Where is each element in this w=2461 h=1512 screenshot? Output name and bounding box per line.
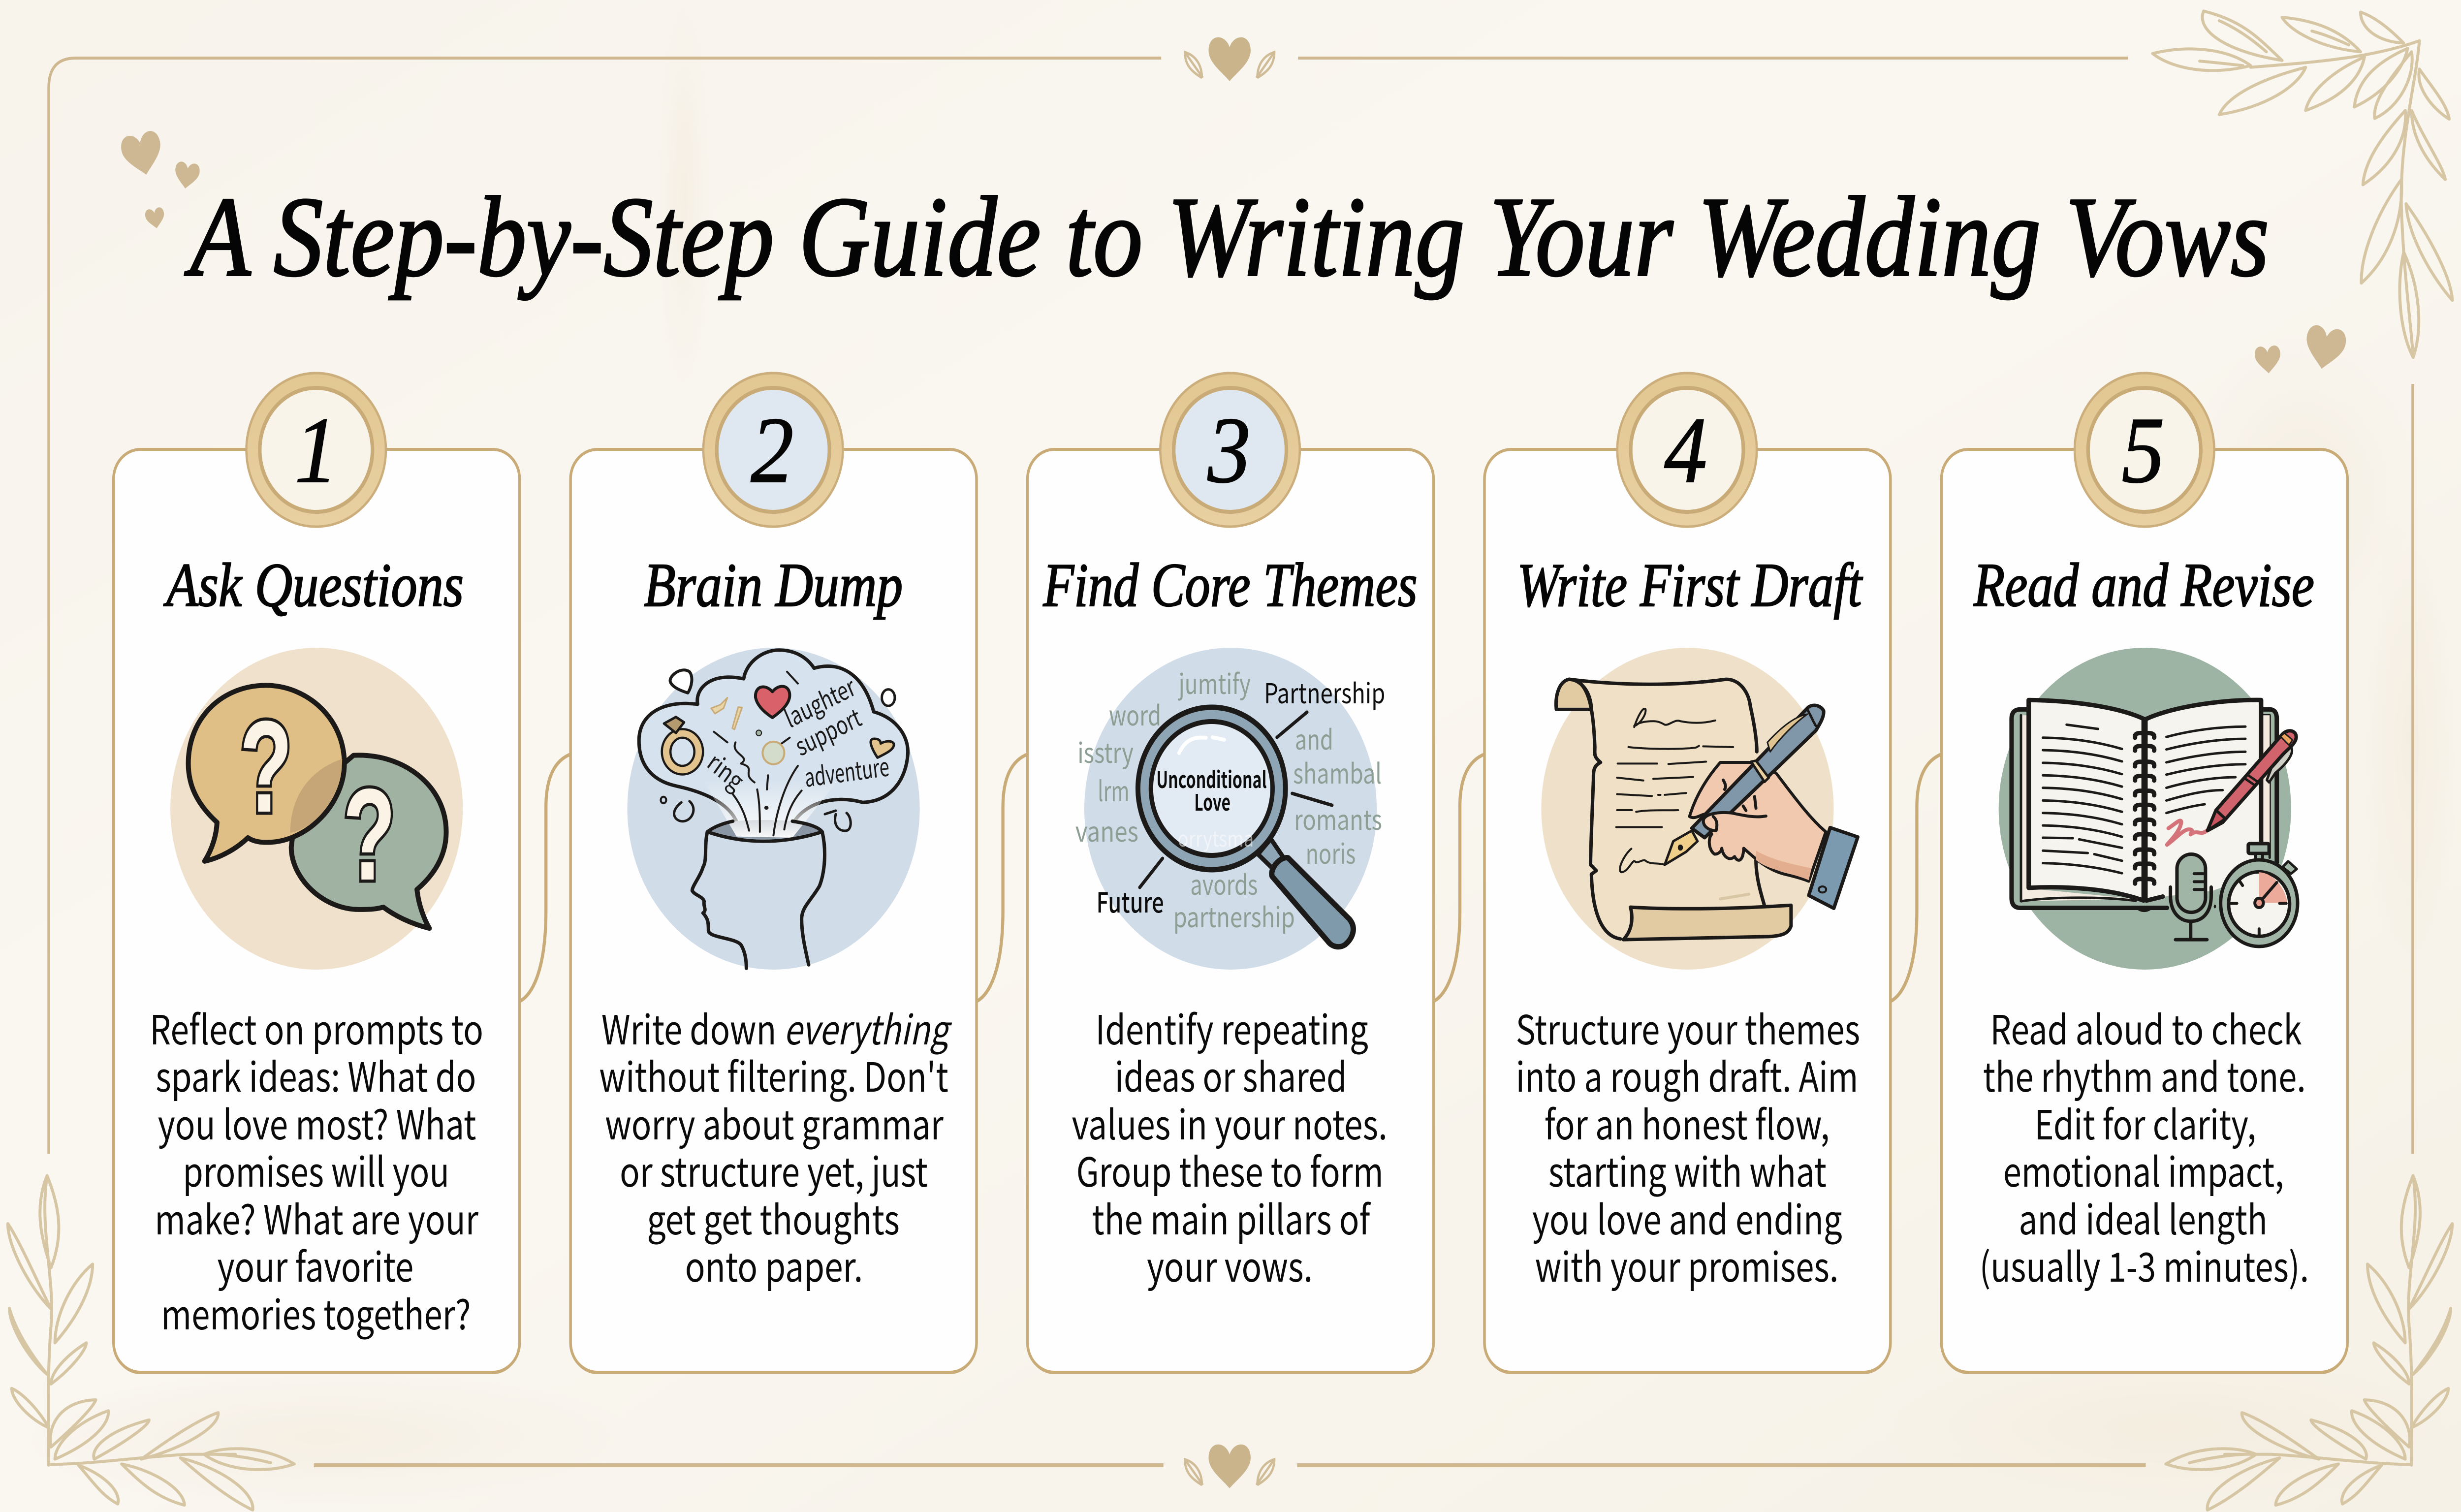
step number 3 xyxy=(1160,373,1300,527)
title: A Step-by-Step Guide to Writing Your Wedding Vows xyxy=(184,174,2269,300)
body text: values in your notes. xyxy=(1072,1093,1388,1151)
icon: magnifying glass over word cloud: and xyxy=(1295,718,1333,758)
icon: magnifying glass over word cloud: isstry xyxy=(1077,731,1134,771)
icon: magnifying glass over word cloud: word xyxy=(1109,694,1161,734)
icon: head with thought cloud: adventure xyxy=(802,747,891,795)
body text: the rhythm and tone. xyxy=(1983,1045,2306,1103)
icon: magnifying glass over word cloud: avords xyxy=(1190,863,1258,903)
body text: make? What are your xyxy=(155,1188,479,1246)
body text: and ideal length xyxy=(2019,1188,2268,1246)
heading: Find Core Themes xyxy=(1043,551,1418,620)
icon: open notebook, red pen, microphone, stopwatch xyxy=(1999,648,2298,970)
icon: magnifying glass over word cloud: jumtify xyxy=(1177,662,1251,702)
step number 5 xyxy=(2075,373,2214,527)
body text: get get thoughts xyxy=(647,1188,900,1246)
icon: magnifying glass over word cloud: romants xyxy=(1294,798,1382,838)
body text xyxy=(1516,998,1860,1293)
body text: with your promises. xyxy=(1535,1235,1838,1293)
heading: Brain Dump xyxy=(644,551,903,620)
body text xyxy=(150,998,483,1341)
body text: ideas or shared xyxy=(1115,1045,1347,1103)
panel: step 5 Read and Revise xyxy=(1941,373,2347,1374)
body text: you love most? What xyxy=(158,1093,476,1151)
icon: magnifying glass over word cloud: partnership xyxy=(1173,896,1295,936)
step number 5: 5 xyxy=(2122,398,2165,503)
icon: magnifying glass over word cloud: lrm xyxy=(1098,770,1130,810)
floral corner: bottom left xyxy=(8,1176,294,1510)
body text: you love and ending xyxy=(1532,1188,1842,1246)
icon: head with thought cloud: laughter xyxy=(778,667,860,735)
icon: head with thought cloud: ring xyxy=(701,743,752,798)
body text: Read aloud to check xyxy=(1990,998,2302,1056)
body text: Edit for clarity, xyxy=(2034,1093,2256,1151)
panel: step 2 Brain Dump xyxy=(570,373,977,1374)
icon: magnifying glass over word cloud: noris xyxy=(1306,832,1356,872)
body text: (usually 1-3 minutes). xyxy=(1980,1235,2309,1293)
body text: starting with what xyxy=(1548,1140,1827,1198)
ornament: top centre heart xyxy=(1185,37,1274,81)
icon: two speech bubbles with question marks: ? xyxy=(343,761,396,908)
icon: magnifying glass over word cloud xyxy=(1075,648,1385,970)
icon: magnifying glass over word cloud: shambal xyxy=(1293,752,1382,792)
heading: Ask Questions xyxy=(163,551,464,620)
icon: two speech bubbles with question marks xyxy=(170,648,463,970)
floral corner: bottom right xyxy=(2166,1176,2452,1510)
body text: your favorite xyxy=(217,1235,413,1293)
heading: Read and Revise xyxy=(1973,551,2314,620)
icon: scroll and hand with fountain pen xyxy=(1541,648,1858,970)
body text: Write down everything xyxy=(601,998,952,1056)
panel: step 4 Write First Draft xyxy=(1484,373,1891,1374)
body text: your vows. xyxy=(1147,1235,1313,1293)
body text xyxy=(599,998,952,1293)
ornament: hearts right xyxy=(2254,323,2348,375)
body text: for an honest flow, xyxy=(1545,1093,1830,1151)
step number 2 xyxy=(703,373,843,527)
body text: onto paper. xyxy=(685,1235,863,1293)
body text xyxy=(1072,998,1388,1293)
body text: into a rough draft. Aim xyxy=(1516,1045,1858,1103)
body text: Group these to form xyxy=(1076,1140,1384,1198)
body text xyxy=(1980,998,2309,1293)
heading: Write First Draft xyxy=(1517,551,1863,620)
body text: promises will you xyxy=(183,1140,449,1198)
step number 4: 4 xyxy=(1664,398,1707,503)
icon: magnifying glass over word cloud: Future xyxy=(1096,881,1164,921)
icon: two speech bubbles with question marks: ? xyxy=(240,693,292,840)
step number 2: 2 xyxy=(751,398,793,503)
body text: spark ideas: What do xyxy=(156,1045,476,1103)
panel: step 1 Ask Questions xyxy=(114,373,520,1374)
step number 1: 1 xyxy=(295,398,338,503)
body text: memories together? xyxy=(161,1283,471,1341)
panel: step 3 Find Core Themes xyxy=(1028,373,1433,1374)
icon: magnifying glass over word cloud: Unconditional xyxy=(1156,762,1267,795)
icon: head with thought cloud: support xyxy=(789,697,866,763)
icon: magnifying glass over word cloud: Love xyxy=(1194,785,1230,818)
connector curves between cards xyxy=(519,754,1942,1002)
floral corner: top right xyxy=(2152,11,2452,357)
icon: magnifying glass over word cloud: orrytsma xyxy=(1178,822,1254,853)
step number 1 xyxy=(247,373,386,527)
body text: or structure yet, just xyxy=(620,1140,928,1198)
step number 4 xyxy=(1617,373,1757,527)
body text: without filtering. Don't xyxy=(599,1045,948,1103)
icon: magnifying glass over word cloud: Partnership xyxy=(1264,672,1385,712)
ornament: bottom centre heart xyxy=(1185,1445,1274,1488)
step number 3: 3 xyxy=(1207,398,1251,503)
ornament: hearts left of title xyxy=(119,129,201,230)
body text: the main pillars of xyxy=(1092,1188,1371,1246)
body text: emotional impact, xyxy=(2003,1140,2284,1198)
body text: Structure your themes xyxy=(1516,998,1860,1056)
body text: Identify repeating xyxy=(1096,998,1368,1056)
icon: head with thought cloud xyxy=(628,648,920,970)
body text: worry about grammar xyxy=(605,1093,944,1151)
body text: Reflect on prompts to xyxy=(150,998,483,1056)
icon: magnifying glass over word cloud: vanes xyxy=(1075,810,1138,850)
